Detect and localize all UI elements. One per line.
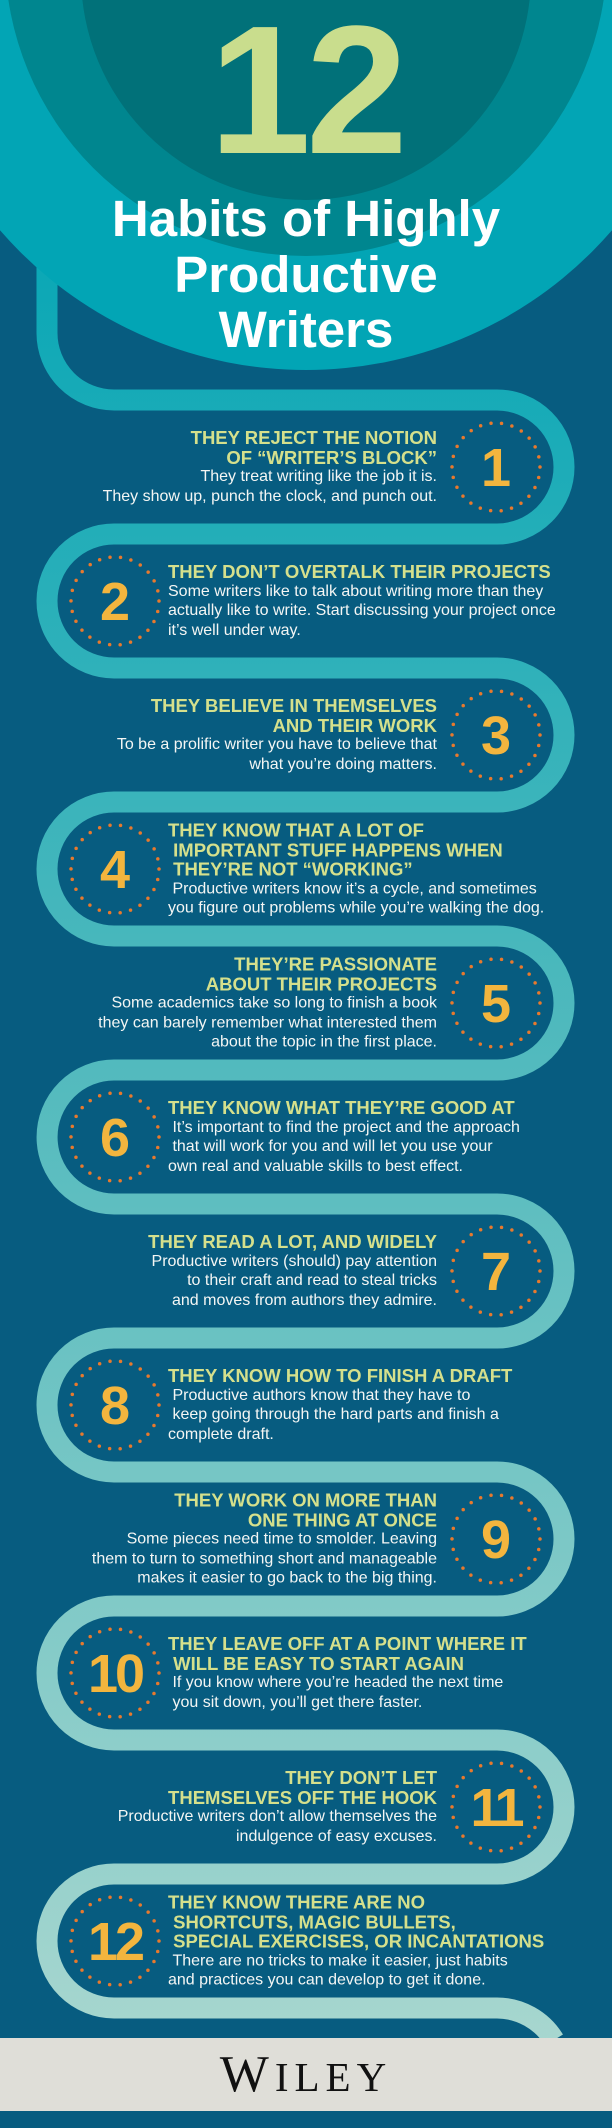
habit 2 text: it’s well under way. <box>168 622 301 638</box>
badge 2 <box>69 556 161 646</box>
badge 4: 4 <box>100 840 130 900</box>
habit 3 text: AND THEIR WORK <box>273 714 437 736</box>
habit 7 text <box>148 1231 437 1308</box>
badge 1 <box>450 422 542 512</box>
habit 9 text: makes it easier to go back to the big thing. <box>137 1569 437 1586</box>
habit 4 text: THEY KNOW THAT A LOT OF <box>168 819 424 840</box>
habit 1 text: THEY REJECT THE NOTION <box>191 427 437 448</box>
habit 7 text: THEY READ A LOT, AND WIDELY <box>148 1231 437 1252</box>
habit 6 text: own real and valuable skills to best effect. <box>168 1158 463 1174</box>
habit 12 text: SHORTCUTS, MAGIC BULLETS, <box>173 1911 456 1932</box>
habit 2 text: actually like to write. Start discussing your project once <box>168 602 556 619</box>
habit 7 text: and moves from authors they admire. <box>172 1292 437 1308</box>
badge 11: 11 <box>470 1778 524 1838</box>
habit 10 text: WILL BE EASY TO START AGAIN <box>173 1652 464 1674</box>
badge 8 <box>69 1360 161 1450</box>
badge 11 <box>450 1762 542 1852</box>
habit 11 text: indulgence of easy excuses. <box>236 1828 437 1844</box>
habit 2 text <box>168 561 556 638</box>
habit 11 text <box>118 1767 437 1844</box>
habit 12 text: THEY KNOW THERE ARE NO <box>168 1891 425 1912</box>
habit 4 text: THEY’RE NOT “WORKING” <box>173 858 413 879</box>
habit 11 text: Productive writers don’t allow themselves the <box>118 1808 437 1825</box>
habit 11 text: THEMSELVES OFF THE HOOK <box>168 1786 437 1808</box>
habit 1 text: OF “WRITER’S BLOCK” <box>226 446 437 468</box>
habit 12 text: There are no tricks to make it easier, just habits <box>172 1952 508 1969</box>
habit 4 text: you figure out problems while you’re walking the dog. <box>168 899 544 916</box>
habit 5 text: they can barely remember what interested them <box>98 1014 437 1031</box>
habit 7 text: Productive writers (should) pay attention <box>152 1252 437 1270</box>
habit 12 text: SPECIAL EXERCISES, OR INCANTATIONS <box>173 1930 544 1951</box>
habit 5 text: Some academics take so long to finish a book <box>111 994 437 1011</box>
habit 10 text: THEY LEAVE OFF AT A POINT WHERE IT <box>168 1633 527 1654</box>
habit 5 text: THEY’RE PASSIONATE <box>234 953 437 974</box>
title <box>112 0 501 358</box>
habit 8 text: Productive authors know that they have to <box>172 1386 470 1404</box>
habit 7 text: to their craft and read to steal tricks <box>187 1272 437 1289</box>
habit 9 text: ONE THING AT ONCE <box>248 1509 437 1530</box>
title: Habits of Highly <box>112 190 501 247</box>
badge 5 <box>450 958 542 1048</box>
habit 6 text: THEY KNOW WHAT THEY’RE GOOD AT <box>168 1097 515 1118</box>
badge 6 <box>69 1092 161 1182</box>
habit 1 text <box>102 427 437 504</box>
habit 3 text: what you’re doing matters. <box>249 756 437 772</box>
badge 12: 12 <box>88 1912 143 1972</box>
badge 7: 7 <box>481 1242 511 1302</box>
habit 3 text: To be a prolific writer you have to believe that <box>117 736 437 753</box>
badge 9: 9 <box>481 1510 511 1570</box>
habit 5 text <box>98 953 437 1050</box>
habit 8 text: THEY KNOW HOW TO FINISH A DRAFT <box>168 1365 512 1386</box>
badge 8: 8 <box>100 1376 130 1436</box>
badge 4 <box>69 824 161 914</box>
habit 9 text: THEY WORK ON MORE THAN <box>174 1489 437 1510</box>
habit 4 text <box>168 819 544 916</box>
habit 1 text: They treat writing like the job it is. <box>200 468 437 485</box>
footer: Wiley logo <box>0 2038 612 2111</box>
habit 10 text: you sit down, you’ll get there faster. <box>172 1694 422 1710</box>
badge 10: 10 <box>88 1644 143 1704</box>
badge 3 <box>450 690 542 780</box>
habit 4 text: Productive writers know it’s a cycle, and sometimes <box>172 880 537 897</box>
habit 3 text: THEY BELIEVE IN THEMSELVES <box>151 695 437 716</box>
badge 9 <box>450 1494 542 1584</box>
habit 9 text <box>92 1489 437 1586</box>
habit 5 text: ABOUT THEIR PROJECTS <box>206 973 437 994</box>
habit 10 text: If you know where you’re headed the next time <box>172 1674 503 1691</box>
habit 3 text <box>117 695 437 772</box>
habit 9 text: Some pieces need time to smolder. Leaving <box>127 1530 437 1547</box>
badge 6: 6 <box>100 1108 130 1168</box>
habit 8 text: keep going through the hard parts and finish a <box>172 1406 499 1423</box>
title: Writers <box>219 301 393 358</box>
badge 2: 2 <box>100 572 130 632</box>
habit 6 text <box>168 1097 520 1174</box>
footer: Wiley logo: WILEY <box>220 2046 392 2103</box>
habit 1 text: They show up, punch the clock, and punch out. <box>103 488 437 504</box>
habit 6 text: It’s important to find the project and the approach <box>172 1118 520 1136</box>
habit 5 text: about the topic in the first place. <box>211 1033 437 1050</box>
habit 11 text: THEY DON’T LET <box>285 1767 437 1788</box>
title: Productive <box>174 246 438 303</box>
badge 7 <box>450 1226 542 1316</box>
habit 6 text: that will work for you and will let you use your <box>172 1138 493 1155</box>
badge 5: 5 <box>481 974 511 1034</box>
badge 3: 3 <box>481 706 511 766</box>
habit 2 text: Some writers like to talk about writing more than they <box>168 582 543 600</box>
habit 12 text <box>168 1891 544 1988</box>
habit 9 text: them to turn to something short and manageable <box>92 1550 437 1567</box>
habit 2 text: THEY DON’T OVERTALK THEIR PROJECTS <box>168 561 551 582</box>
badge 10 <box>69 1628 161 1718</box>
badge 12 <box>69 1896 161 1986</box>
habit 12 text: and practices you can develop to get it done. <box>168 1971 486 1988</box>
habit 8 text: complete draft. <box>168 1426 274 1442</box>
habit 8 text <box>168 1365 512 1442</box>
habit 10 text <box>168 1633 527 1710</box>
badge 1: 1 <box>481 438 511 498</box>
habit 4 text: IMPORTANT STUFF HAPPENS WHEN <box>173 839 503 860</box>
